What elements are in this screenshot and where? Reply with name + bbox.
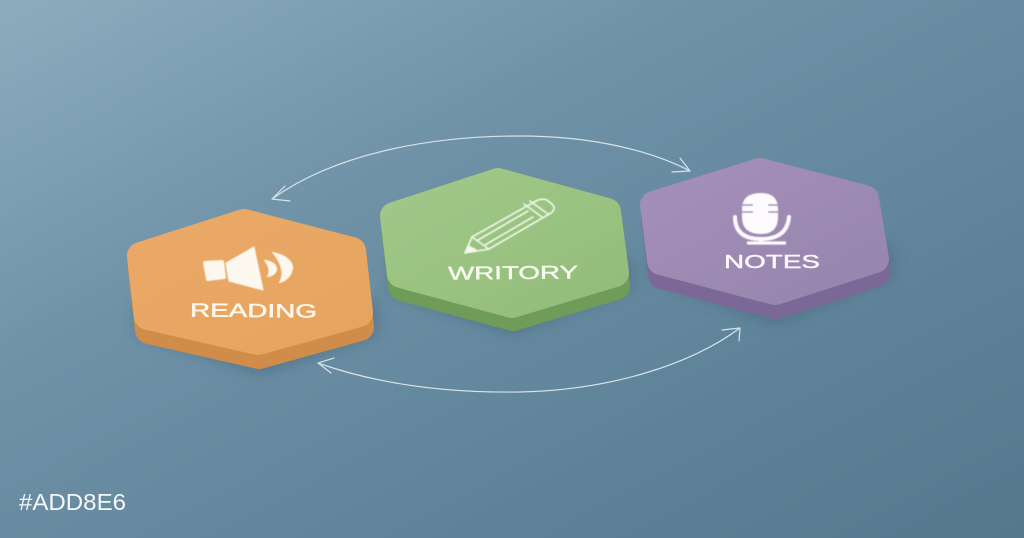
panel: writory hexagon [390, 182, 632, 335]
hexagon top: reading [141, 223, 359, 341]
panel: reading hexagon [135, 223, 378, 375]
hexagon top: writory [394, 182, 615, 304]
icon: pencil [465, 199, 554, 253]
arrow: bottom curved double-headed arrow [318, 328, 740, 392]
icon: microphone [735, 193, 789, 243]
hexagon top: notes [654, 172, 875, 291]
panel: notes hexagon [650, 172, 892, 325]
hexagon side: reading [142, 237, 360, 355]
label: reading: READING [190, 300, 317, 323]
label: notes: NOTES [724, 252, 820, 272]
hexagon side: writory [395, 195, 616, 317]
icon: speaker [203, 247, 293, 290]
hexagon side: notes [655, 186, 876, 305]
arrow: top curved double-headed arrow [272, 136, 690, 201]
colour code caption: #ADD8E6 [19, 489, 126, 515]
label: writory: WRITORY [448, 261, 578, 284]
